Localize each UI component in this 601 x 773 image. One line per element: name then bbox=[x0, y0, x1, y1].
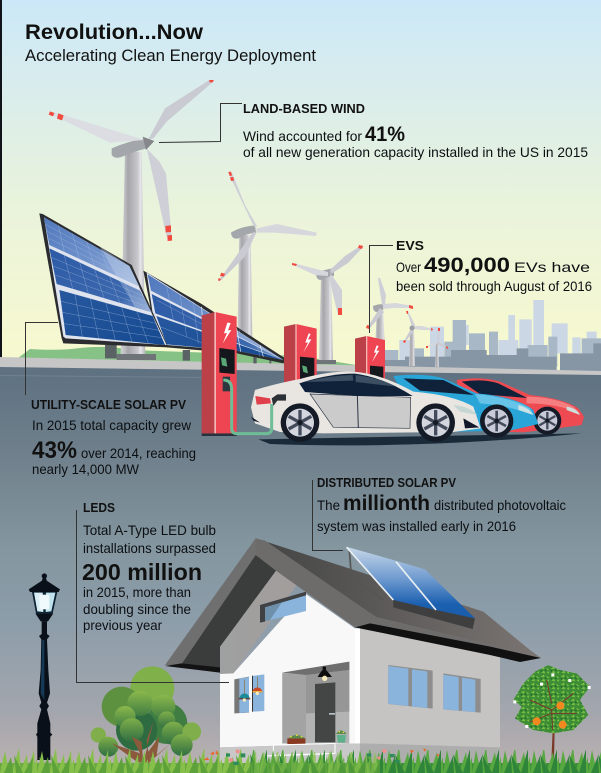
text: land-based wind: Wind accounted for bbox=[243, 128, 362, 144]
green hills bbox=[18, 347, 356, 372]
charging station 2 bbox=[284, 324, 317, 387]
sky background bbox=[0, 0, 601, 380]
charging station 1 bbox=[202, 312, 237, 436]
text: land-based wind bbox=[243, 101, 588, 160]
text: EVs bbox=[396, 238, 592, 294]
text: LEDs: 200 million bbox=[82, 559, 202, 585]
text: distributed solar: system was installed early in 2016 bbox=[317, 518, 516, 534]
text: utility-scale solar bbox=[31, 397, 196, 477]
text: land-based wind: of all new generation capacity installed in the US in 2015 bbox=[243, 144, 588, 160]
text: LEDs: doubling since the bbox=[83, 601, 191, 617]
text: LEDs: previous year bbox=[83, 617, 162, 633]
text: distributed solar: DISTRIBUTED SOLAR PV bbox=[317, 475, 456, 490]
title: Revolution...Now bbox=[25, 20, 203, 44]
text: LEDs: LEDS bbox=[83, 500, 115, 515]
text: EVs: Over bbox=[396, 259, 421, 275]
road and ground bbox=[0, 357, 601, 773]
title bbox=[25, 20, 316, 65]
electric cars bbox=[223, 372, 584, 445]
text: utility-scale solar: In 2015 total capacity grew bbox=[32, 417, 192, 433]
house bbox=[165, 538, 541, 773]
wind turbine 3 bbox=[292, 245, 363, 364]
wind turbine 1 bbox=[49, 80, 214, 360]
red car bbox=[457, 378, 584, 435]
city skyline bbox=[385, 300, 601, 375]
text: LEDs bbox=[82, 500, 216, 633]
charging cable bbox=[223, 380, 272, 434]
porch and door bbox=[263, 662, 349, 773]
wind turbine 6 bbox=[426, 328, 448, 367]
text: utility-scale solar: nearly 14,000 MW bbox=[32, 461, 140, 477]
street lamp bbox=[29, 573, 60, 760]
text: distributed solar: The bbox=[317, 497, 340, 513]
white car bbox=[251, 372, 481, 442]
right windows bbox=[388, 665, 481, 713]
text: distributed solar: millionth bbox=[343, 492, 430, 515]
text: EVs: EVS bbox=[396, 238, 424, 253]
text: EVs: been sold through August of 2016 bbox=[396, 278, 592, 294]
blue car bbox=[393, 375, 538, 438]
text: LEDs: installations surpassed bbox=[83, 540, 216, 556]
garden flowers bbox=[203, 748, 440, 765]
charging station 3 bbox=[355, 336, 385, 380]
text: distributed solar bbox=[317, 475, 566, 534]
wind turbine 2 bbox=[218, 172, 317, 340]
text: land-based wind: 41% bbox=[365, 123, 405, 146]
LED window bbox=[234, 674, 264, 713]
bush tree bbox=[91, 666, 201, 763]
text: utility-scale solar: over 2014, reaching bbox=[81, 445, 196, 461]
wind turbine 5 bbox=[403, 311, 433, 366]
grass bbox=[0, 746, 601, 773]
text: LEDs: Total A-Type LED bulb bbox=[83, 522, 216, 538]
text: EVs: 490,000 bbox=[424, 254, 510, 277]
leader lines bbox=[26, 104, 393, 682]
text: utility-scale solar: UTILITY-SCALE SOLAR PV bbox=[31, 397, 186, 412]
left edge strip bbox=[0, 0, 2, 773]
solar panel array bbox=[39, 213, 287, 363]
orange tree bbox=[513, 665, 591, 761]
text: land-based wind: LAND-BASED WIND bbox=[243, 101, 365, 116]
text: LEDs: in 2015, more than bbox=[83, 584, 191, 600]
text: EVs: EVs have bbox=[514, 259, 590, 275]
text: distributed solar: distributed photovoltaic bbox=[434, 497, 566, 513]
title: Accelerating Clean Energy Deployment bbox=[25, 46, 316, 65]
wind turbine 4 bbox=[366, 278, 413, 350]
text: utility-scale solar: 43% bbox=[32, 437, 77, 464]
